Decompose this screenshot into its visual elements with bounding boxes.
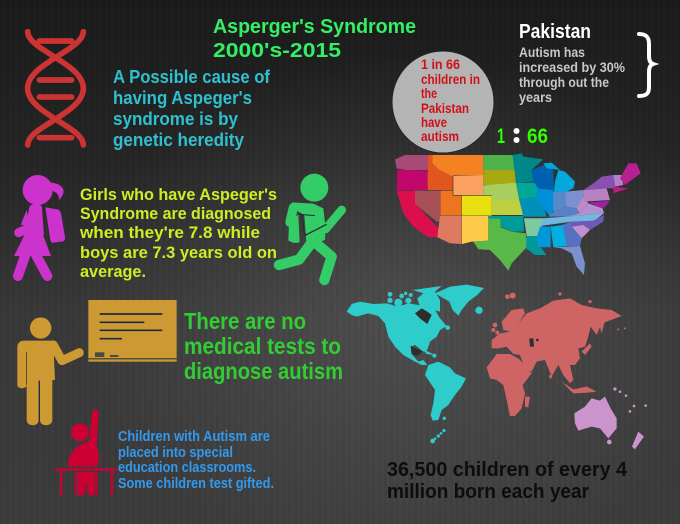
title: 2000's-2015 [213,40,341,62]
ratio 1 : 66: 66 [527,125,548,148]
Americas [347,285,484,443]
title: Asperger's Syndrome [213,16,416,38]
map: world [347,285,647,449]
title [213,16,416,62]
text: births statistic: million born each year [387,481,589,503]
text: genetic cause: syndrome is by [113,108,239,129]
text: Pakistan statistic: through out the [519,74,609,90]
text: Pakistan statistic: increased by 30% [519,59,625,75]
icon: girl with backpack [14,175,65,276]
text: Pakistan statistic: Pakistan [519,21,591,43]
callout: 1 in 66 circle: the [421,85,437,101]
text: no medical tests: medical tests to [184,333,341,359]
icon: running boy with backpack [279,174,342,280]
panel: teacher and board [17,300,177,425]
text: Pakistan statistic: Autism has [519,44,585,60]
Oceania [574,387,647,449]
text: no medical tests [184,308,343,384]
text: special education: Some children test gifted. [118,476,274,492]
text: births statistic: 36,500 children of every 4 [387,459,628,481]
text: genetic cause: A Possible cause of [113,66,271,87]
text: special education [118,429,274,492]
icon: student raising hand at desk [55,410,118,496]
callout: 1 in 66 circle: autism [421,128,459,144]
Eurasia and Africa [487,292,626,416]
text: no medical tests: There are no [184,308,306,334]
text: genetic cause [113,66,271,150]
callout: 1 in 66 circle: have [421,114,447,130]
text: Pakistan statistic: years [519,89,552,105]
text: special education: placed into special [118,445,233,461]
callout: 1 in 66 circle: Pakistan [421,100,469,116]
ratio 1 : 66 [497,125,548,148]
text: diagnosis ages: Syndrome are diagnosed [80,204,271,223]
inland seas [529,338,534,347]
text: genetic cause: genetic heredity [113,129,245,150]
text: special education: education classrooms. [118,460,256,476]
text: diagnosis ages: boys are 7.3 years old on [80,243,277,262]
teacher figure [17,317,79,425]
text: no medical tests: diagnose autism [184,358,343,384]
callout: 1 in 66 circle [392,51,494,153]
text: diagnosis ages: Girls who have Aspeger's [80,185,277,204]
icon: DNA helix [28,32,83,145]
text: special education: Children with Autism are [118,429,270,445]
map: United States by state [395,153,641,275]
callout: 1 in 66 circle: children in [421,71,480,87]
text: Pakistan statistic [519,21,625,105]
callout: 1 in 66 circle: 1 in 66 [421,56,460,72]
text: births statistic [387,459,628,503]
icon: white brace [639,34,653,96]
ratio 1 : 66: 1 [497,125,505,148]
Hudson Bay [415,308,432,324]
text: genetic cause: having Aspeger's [113,87,252,108]
text: diagnosis ages [79,185,277,281]
text: diagnosis ages: average. [80,262,146,281]
text: diagnosis ages: when they're 7.8 while [79,223,260,242]
board [88,300,177,362]
